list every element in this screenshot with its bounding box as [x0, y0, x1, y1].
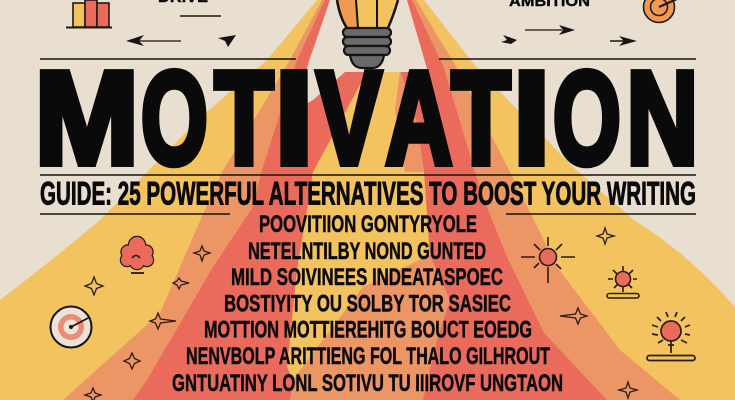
title [35, 44, 698, 192]
rules [40, 59, 696, 214]
sparkles [85, 228, 637, 400]
title: A [386, 44, 452, 192]
icon: sun large [521, 237, 575, 283]
list of alternatives: BOSTIYITY OU SOLBY TOR SASIEC [224, 290, 511, 318]
icon: light bulb [337, 0, 398, 68]
list of alternatives: MOTTION MOTTIEREHITG BOUCT EOEDG [204, 316, 532, 344]
list of alternatives: GNTUATINY LONL SOTIVU TU IIIROVF UNGTAON [172, 370, 563, 397]
title: I [275, 44, 313, 192]
title: O [553, 44, 621, 192]
icon: target left [50, 306, 92, 348]
list of alternatives: NENVBOLP ARITTIENG FOL THALO GILHROUT [186, 343, 550, 370]
icon: sun on stand [607, 266, 639, 298]
icon: target top right [644, 0, 677, 22]
arrows [126, 16, 637, 47]
icon: red cloud tree [121, 237, 153, 273]
icon: sun lamp [647, 312, 695, 360]
icon: bar chart [66, 0, 112, 28]
list of alternatives: MILD SOIVINEES INDEATASPOEC [231, 264, 503, 291]
title: M [35, 44, 139, 192]
list of alternatives: POOVITIION GONTYRYOLE [259, 211, 477, 238]
title: T [215, 44, 274, 192]
title: N [627, 44, 698, 192]
title: I [513, 44, 550, 192]
title: O [141, 44, 208, 192]
list of alternatives: NETELNTILBY NOND GUNTED [248, 238, 486, 265]
list of alternatives [172, 211, 563, 397]
title: V [316, 44, 382, 192]
title: T [452, 44, 510, 192]
